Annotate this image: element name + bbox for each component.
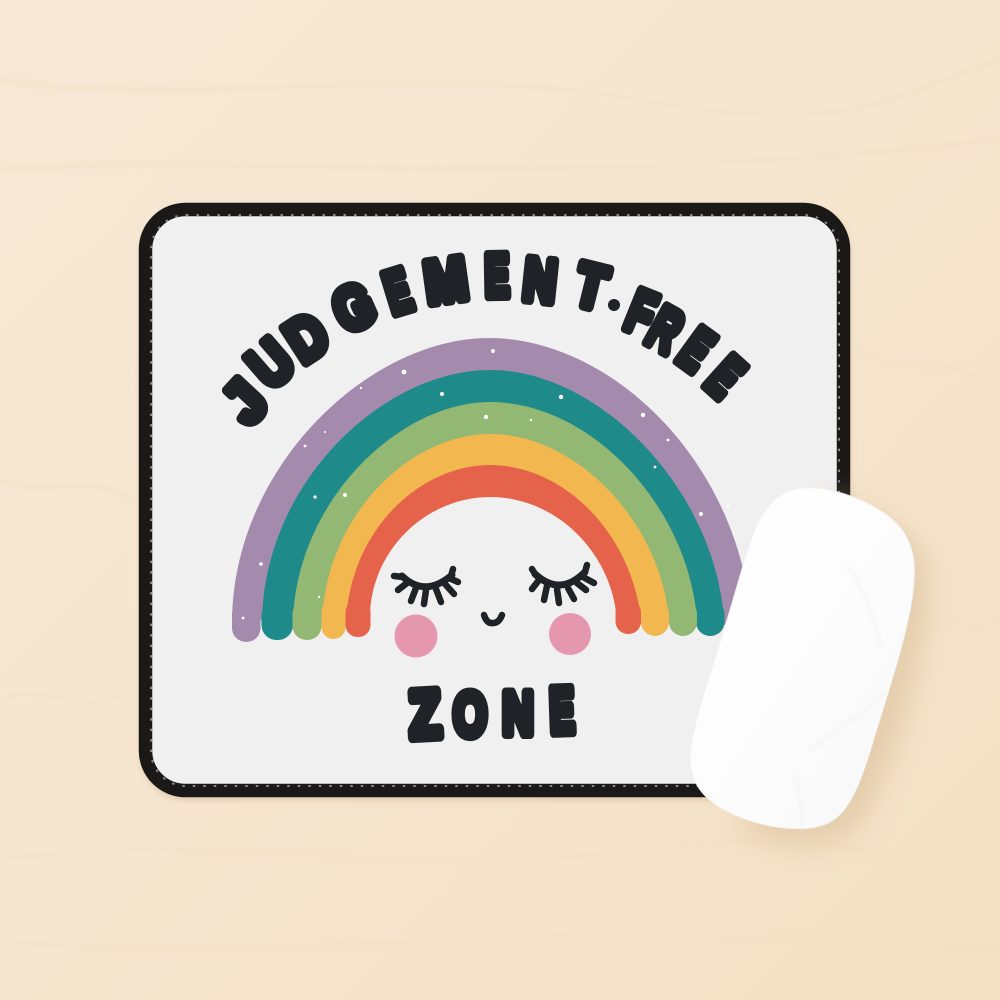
heading: JUDGEMENT-FREE: G (322, 269, 385, 346)
left closed eye (394, 569, 458, 604)
heading: JUDGEMENT-FREE: D (273, 300, 340, 376)
heading: ZONE: N (502, 681, 534, 748)
heading: ZONE: Z (408, 678, 442, 752)
purple band (232, 338, 752, 625)
heading: JUDGEMENT-FREE: E (376, 256, 420, 327)
mouse shadow (735, 500, 930, 846)
green band (293, 402, 697, 620)
pad shadow (140, 206, 851, 801)
border stitching (151, 215, 839, 786)
right closed eye (532, 565, 594, 603)
red band (346, 465, 641, 622)
teal band (262, 370, 724, 620)
heading: JUDGEMENT-FREE (210, 242, 757, 436)
heading: JUDGEMENT-FREE: E (694, 343, 757, 410)
inner arch (370, 497, 616, 632)
heading: ZONE: E (548, 676, 576, 747)
heading: JUDGEMENT-FREE: E (484, 242, 510, 309)
heading: JUDGEMENT-FREE: F (617, 277, 665, 348)
heading: ZONE (408, 676, 576, 752)
heading: JUDGEMENT-FREE: U (235, 326, 307, 401)
computer mouse (690, 488, 930, 846)
heading: JUDGEMENT-FREE: N (520, 247, 560, 316)
rainbow (232, 338, 752, 642)
stars (242, 349, 729, 619)
heading: JUDGEMENT-FREE: M (420, 244, 472, 317)
pad surface (146, 210, 843, 791)
band scallop ends (232, 600, 724, 642)
yellow band (322, 434, 669, 622)
mouse pad (140, 206, 851, 801)
mouth (484, 615, 502, 623)
heading: JUDGEMENT-FREE: T (568, 250, 614, 323)
heading: JUDGEMENT-FREE: E (666, 315, 726, 384)
mouse highlights (795, 565, 885, 829)
heading: JUDGEMENT-FREE: R (637, 293, 694, 366)
heading: ZONE: O (453, 681, 487, 749)
face (394, 565, 594, 658)
heading: JUDGEMENT-FREE: J (210, 368, 280, 436)
right cheek (549, 613, 591, 655)
mouse body (690, 488, 914, 829)
stitched black border (146, 210, 844, 790)
left cheek (394, 614, 438, 658)
